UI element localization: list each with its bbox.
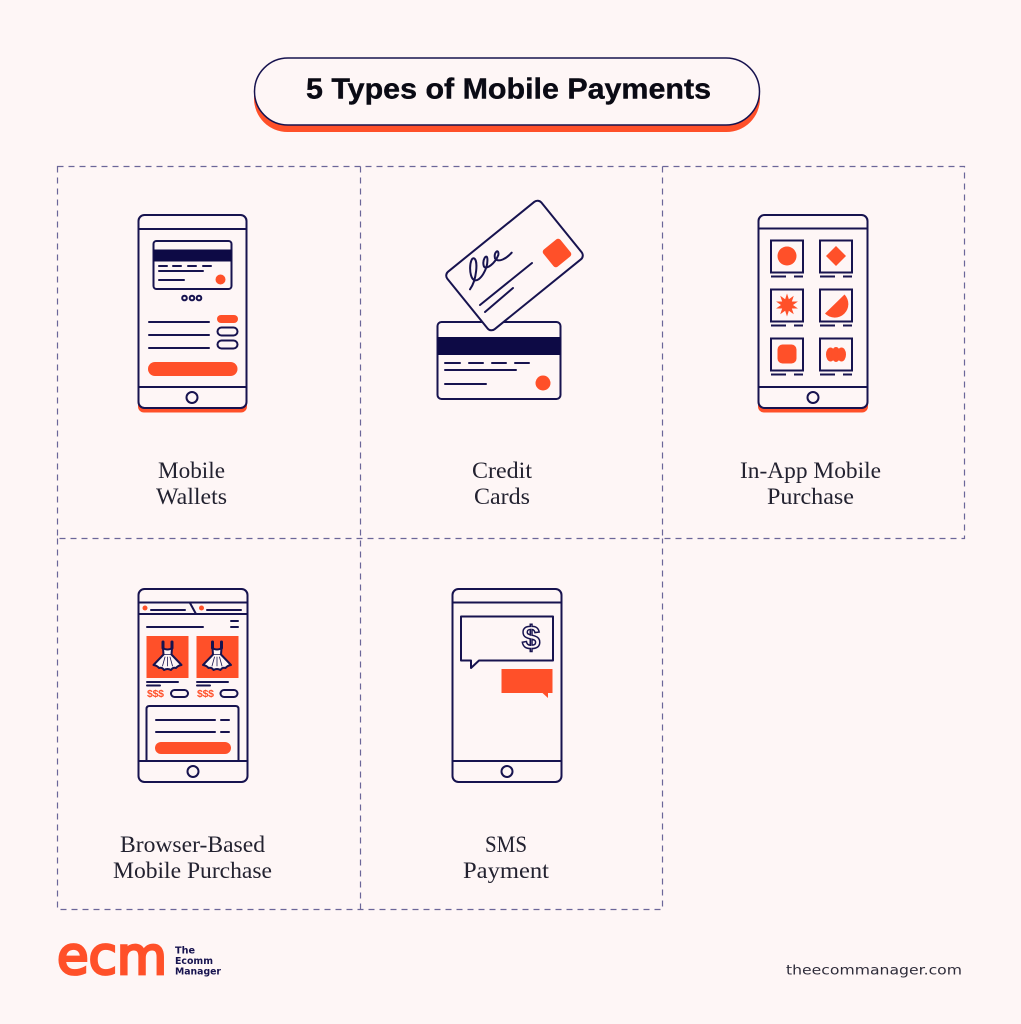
label: browser-based mobile purchase: Browser-Based [120, 832, 266, 857]
logo: ecm the ecomm manager: Ecomm [175, 956, 213, 967]
label: in-app mobile purchase: Purchase [767, 484, 854, 509]
label: in-app mobile purchase: In-App Mobile [740, 458, 881, 483]
logo: ecm the ecomm manager: Manager [175, 966, 221, 978]
icon: browser-based purchase phone: $$$ [147, 688, 164, 700]
icon: sms payment phone [452, 589, 562, 782]
logo: ecm the ecomm manager [57, 927, 221, 987]
icon: browser-based purchase phone: $$$ [197, 688, 214, 700]
label: sms payment: Payment [463, 858, 550, 883]
website url: theecommanager.com [786, 962, 962, 978]
title pill: 5 Types of Mobile Payments [306, 74, 711, 106]
icon: browser-based purchase phone [138, 589, 248, 782]
label: browser-based mobile purchase: Mobile Purchase [113, 858, 272, 883]
icon: sms payment phone: $ [522, 619, 540, 656]
label: sms payment: SMS [485, 832, 527, 857]
label: credit cards: Credit [472, 458, 533, 483]
label: mobile wallets: Mobile [158, 458, 225, 483]
icon: in-app purchase phone [758, 215, 868, 412]
logo: ecm the ecomm manager: ecm [57, 927, 167, 987]
logo: ecm the ecomm manager: The [175, 946, 195, 956]
label: mobile wallets: Wallets [156, 484, 227, 509]
icon: credit cards [438, 199, 585, 399]
title pill [254, 58, 760, 132]
label: credit cards: Cards [474, 484, 530, 509]
icon: mobile wallet phone [138, 215, 247, 412]
